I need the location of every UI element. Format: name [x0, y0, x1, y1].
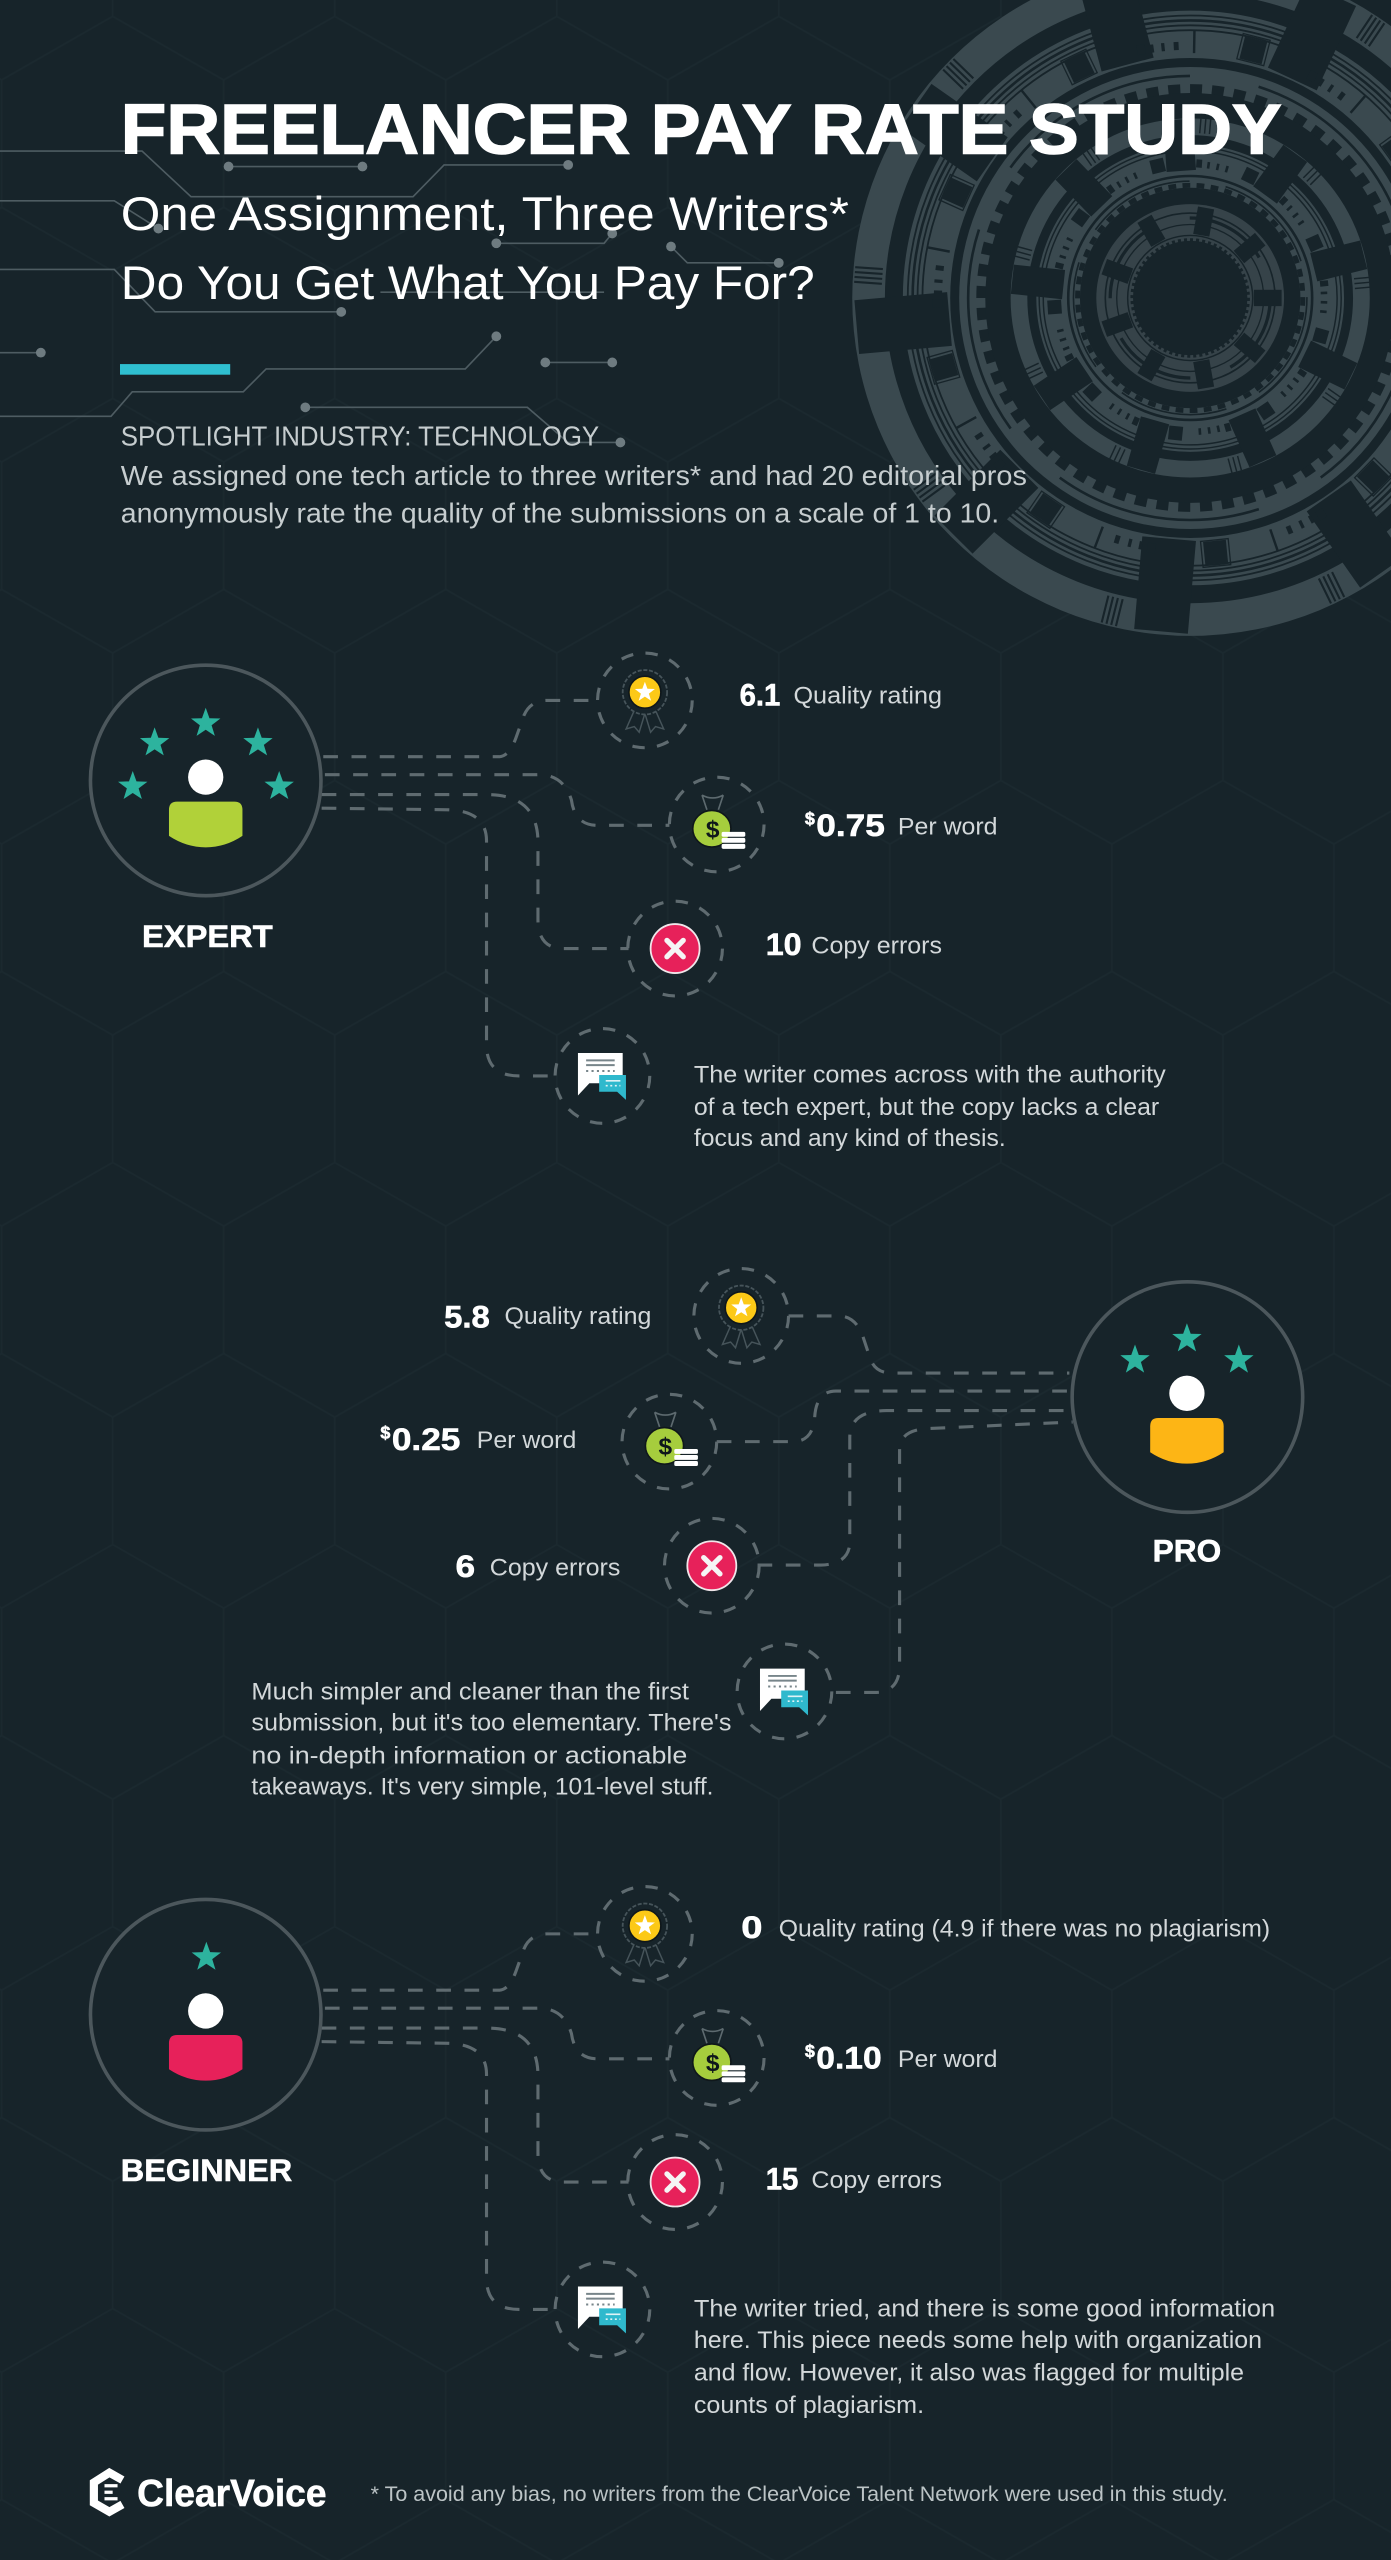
beginner comment [694, 2296, 1275, 2419]
icon: rating [598, 1887, 692, 1981]
pro comment: Much simpler and cleaner than the first [251, 1679, 689, 1706]
intro text [121, 421, 1027, 528]
expert per word [805, 808, 998, 843]
panel: expert [90, 653, 1166, 1152]
pro avatar [1072, 1282, 1303, 1512]
beginner copy errors: 15 [766, 2161, 798, 2196]
beginner per word: $ [805, 2041, 815, 2061]
pro per word: $ [380, 1422, 390, 1442]
pro quality rating [444, 1299, 651, 1334]
icon: comment [555, 2262, 650, 2357]
expert comment: focus and any kind of thesis. [694, 1125, 1006, 1152]
icon: errors [664, 1518, 759, 1613]
beginner comment: and flow. However, it also was flagged for multiple [694, 2359, 1244, 2386]
beginner comment: here. This piece needs some help with organization [694, 2327, 1262, 2354]
pro comment: no in-depth information or actionable [251, 1742, 687, 1769]
panel: pro [251, 1269, 1303, 1800]
expert avatar [90, 665, 321, 896]
subtitle line 1: One Assignment, Three Writers* [121, 188, 849, 241]
icon: comment [737, 1644, 832, 1739]
icon: errors [628, 901, 722, 996]
intro text: SPOTLIGHT INDUSTRY: TECHNOLOGY [121, 421, 599, 452]
footnote: * To avoid any bias, no writers from the ClearVoice Talent Network were used in this study. [371, 2483, 1228, 2506]
beginner per word: Per word [898, 2046, 998, 2073]
pro per word: Per word [477, 1427, 576, 1454]
beginner per word: 0.10 [816, 2041, 882, 2076]
expert copy errors: Copy errors [811, 932, 942, 959]
expert comment: The writer comes across with the authority [694, 1061, 1166, 1088]
pro quality rating: 5.8 [444, 1299, 490, 1334]
expert copy errors: 10 [766, 927, 802, 962]
accent bar [120, 364, 230, 375]
expert per word: Per word [898, 813, 998, 840]
expert copy errors [766, 927, 942, 962]
title: FREELANCER PAY RATE STUDY [121, 89, 1282, 168]
beginner comment: The writer tried, and there is some good information [694, 2296, 1275, 2323]
expert connectors [322, 700, 669, 1076]
icon: rating [694, 1269, 789, 1363]
pro comment: submission, but it's too elementary. There's [251, 1710, 731, 1737]
logo: ClearVoice: ClearVoice [137, 2472, 327, 2514]
pro copy errors: 6 [456, 1549, 475, 1584]
beginner quality rating: 0 [741, 1910, 762, 1945]
pro comment [251, 1679, 731, 1800]
pro copy errors: Copy errors [490, 1555, 620, 1582]
beginner avatar [90, 1899, 321, 2130]
expert comment [694, 1061, 1166, 1152]
expert quality rating [740, 677, 942, 712]
expert comment: of a tech expert, but the copy lacks a clear [694, 1094, 1159, 1121]
pro label: PRO [1153, 1534, 1221, 1569]
expert per word: 0.75 [816, 808, 885, 843]
beginner copy errors [766, 2161, 942, 2196]
pro comment: takeaways. It's very simple, 101-level stuff. [251, 1773, 713, 1800]
intro text: We assigned one tech article to three writers* and had 20 editorial pros [121, 460, 1027, 491]
beginner copy errors: Copy errors [811, 2167, 942, 2194]
intro text: anonymously rate the quality of the submissions on a scale of 1 to 10. [121, 497, 999, 528]
beginner quality rating: Quality rating (4.9 if there was no plagiarism) [779, 1915, 1270, 1942]
expert label: EXPERT [142, 919, 273, 954]
subtitle line 2: Do You Get What You Pay For? [121, 257, 815, 310]
icon: money [669, 777, 764, 872]
icon: comment [555, 1029, 650, 1123]
circuit line decoration [0, 151, 784, 447]
pro per word [380, 1422, 576, 1457]
pro copy errors [456, 1549, 620, 1584]
gear decoration [827, 0, 1391, 645]
icon: money [622, 1394, 717, 1489]
beginner connectors [322, 1934, 669, 2309]
pro connectors [717, 1316, 1073, 1692]
pro quality rating: Quality rating [504, 1303, 651, 1330]
expert quality rating: 6.1 [740, 677, 780, 712]
icon: errors [628, 2135, 722, 2229]
pro per word: 0.25 [392, 1422, 460, 1457]
icon: rating [598, 653, 692, 748]
beginner label: BEGINNER [121, 2153, 292, 2188]
beginner comment: counts of plagiarism. [694, 2392, 924, 2419]
beginner per word [805, 2041, 998, 2076]
expert quality rating: Quality rating [793, 683, 942, 710]
icon: money [669, 2011, 764, 2105]
expert per word: $ [805, 808, 815, 828]
panel: beginner [90, 1887, 1275, 2419]
